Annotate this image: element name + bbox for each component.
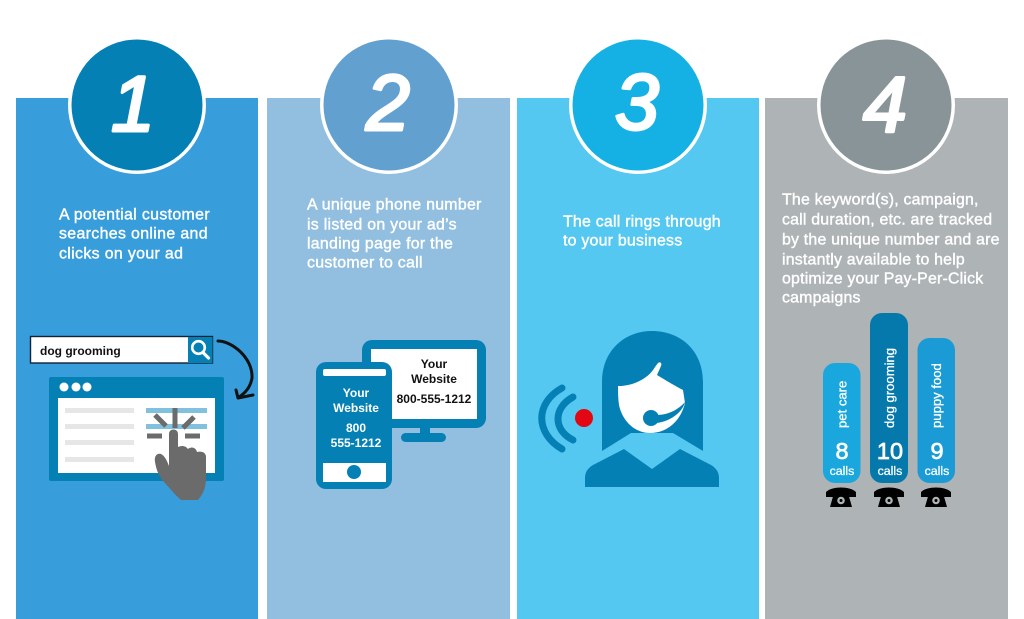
icon: mobile phone: Your	[343, 386, 370, 400]
step 4 text: call duration, etc. are tracked	[782, 212, 992, 228]
arrow: search to page	[218, 341, 253, 398]
step 2 text: A unique phone number	[307, 196, 482, 214]
icon: mobile phone: 555-1212	[331, 436, 382, 450]
step 4 number badge	[817, 36, 955, 174]
step 1 number badge: 1	[111, 59, 155, 148]
icon: telephone 1	[826, 488, 856, 507]
icon: mobile phone: 800	[346, 421, 366, 435]
step 2 text: is listed on your ad’s	[307, 216, 457, 234]
chart: pet care bar: calls	[830, 464, 854, 478]
icon: desktop monitor: 800-555-1212	[397, 392, 472, 406]
step 2 number badge: 2	[365, 58, 410, 147]
icon: ringing signal	[542, 388, 593, 449]
icon: desktop monitor: Your	[421, 357, 448, 371]
chart: dog grooming bar: dog grooming	[882, 348, 897, 428]
chart: pet care bar	[823, 363, 860, 483]
icon: telephone 3	[921, 488, 951, 507]
chart: dog grooming bar: 10	[877, 438, 903, 464]
step 1 number badge	[68, 36, 206, 174]
step 1 text: searches online and	[59, 226, 208, 242]
step 4 text: instantly available to help	[782, 252, 965, 268]
chart: puppy food bar: 9	[930, 438, 944, 464]
chart: puppy food bar: puppy food	[929, 363, 944, 428]
step 4 text: optimize your Pay-Per-Click	[782, 270, 983, 288]
chart: dog grooming bar: calls	[878, 464, 902, 478]
panel: step 1	[16, 36, 258, 619]
chart: pet care bar: pet care	[834, 381, 850, 428]
step 1 text: A potential customer	[59, 206, 210, 224]
step 2 number badge	[320, 36, 458, 174]
chart: puppy food bar: calls	[925, 464, 949, 478]
icon: desktop monitor: Website	[411, 372, 457, 386]
step 2 text: customer to call	[307, 254, 423, 272]
icon: telephone 2	[874, 488, 904, 507]
icon: search box	[30, 336, 212, 363]
panel: step 4	[765, 36, 1008, 619]
chart: dog grooming bar	[870, 313, 908, 483]
step 4 text: by the unique number and are	[782, 232, 1000, 248]
icon: mobile phone: Website	[333, 401, 379, 415]
step 1 text: clicks on your ad	[59, 246, 183, 262]
panel: step 2	[267, 36, 510, 619]
icon: search box: dog grooming	[40, 344, 121, 358]
step 3 number badge	[569, 36, 707, 174]
icon: mobile phone	[316, 362, 392, 489]
icon: browser window with clicking hand	[49, 377, 224, 500]
step 2 text: landing page for the	[307, 236, 453, 252]
icon: call agent with headset	[585, 331, 719, 487]
icon: desktop monitor	[362, 340, 486, 442]
step 4 text: campaigns	[782, 290, 861, 306]
step 3 text: The call rings through	[563, 214, 721, 230]
chart: puppy food bar	[918, 338, 955, 483]
step 3 text: to your business	[563, 232, 682, 250]
panel: step 3	[517, 36, 759, 619]
step 4 number badge: 4	[863, 60, 907, 149]
step 4 text: The keyword(s), campaign,	[782, 192, 979, 208]
chart: pet care bar: 8	[835, 438, 849, 464]
step 3 number badge: 3	[615, 57, 659, 146]
